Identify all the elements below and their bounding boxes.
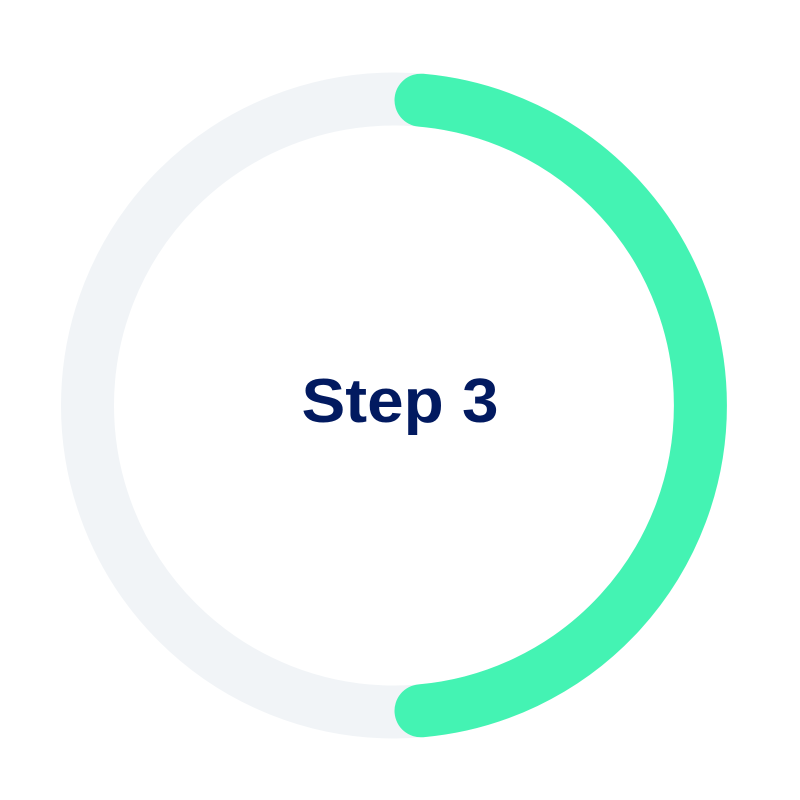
center label: Step 3 <box>302 367 498 436</box>
progress arc <box>421 100 700 711</box>
track ring <box>88 99 700 712</box>
